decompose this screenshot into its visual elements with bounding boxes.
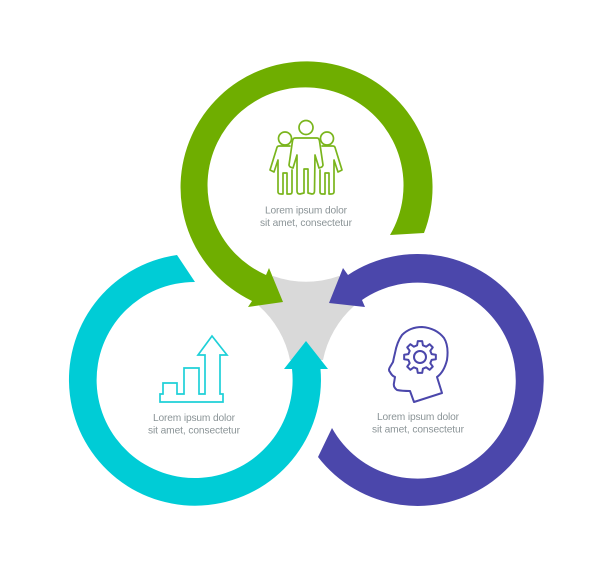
- text: purple label: sit amet, consectetur: [372, 424, 465, 436]
- icon: head with gear: [389, 327, 448, 402]
- text: green label: [260, 206, 353, 229]
- green circular arrow: [181, 61, 433, 307]
- icon: rising bar chart with arrow: [160, 336, 227, 402]
- icon: group of people: [270, 120, 342, 194]
- text: green label: Lorem ipsum dolor: [265, 206, 348, 216]
- central grey triangle: [259, 276, 354, 360]
- text: purple label: Lorem ipsum dolor: [377, 412, 460, 423]
- text: cyan label: sit amet, consectetur: [148, 426, 241, 436]
- purple circular arrow: [318, 254, 544, 506]
- cyan circular arrow: [69, 255, 328, 506]
- text: cyan label: [148, 413, 241, 436]
- text: cyan label: Lorem ipsum dolor: [153, 413, 236, 424]
- text: green label: sit amet, consectetur: [260, 218, 353, 229]
- text: purple label: [372, 412, 465, 436]
